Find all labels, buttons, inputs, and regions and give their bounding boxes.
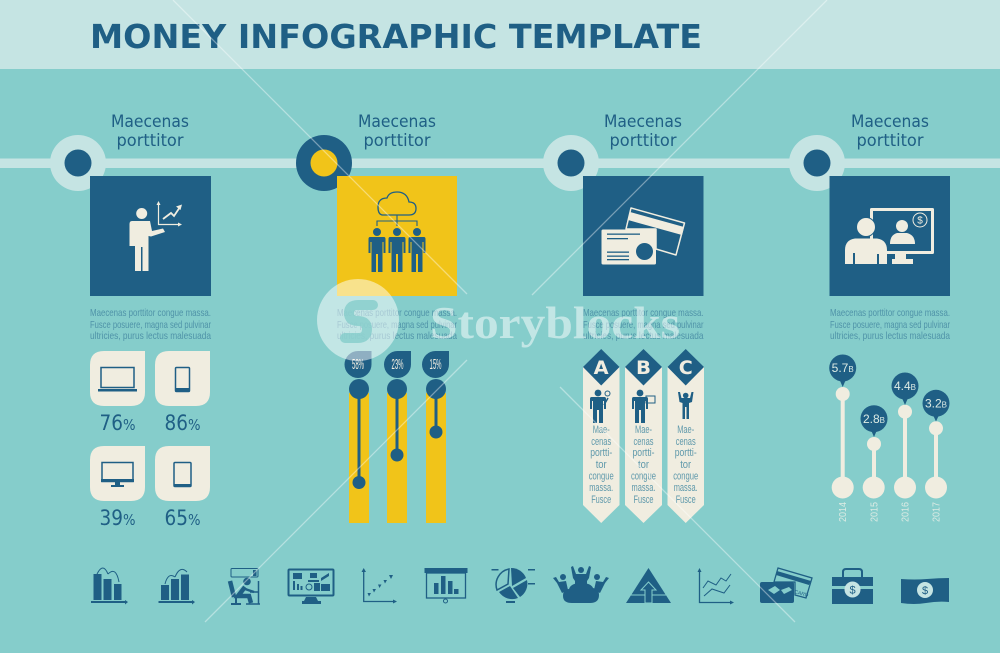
heading 2: Maecenas (358, 112, 436, 132)
icon: briefcase (832, 569, 873, 604)
paragraph 4: ultricies, purus lectus malesuada (830, 330, 950, 342)
tag B: cenas (634, 436, 654, 448)
heading 1 (111, 112, 189, 151)
tag C: congue (673, 470, 698, 482)
tag B: Mae- (635, 424, 652, 436)
icon: cloud team (337, 176, 457, 296)
icon: banknote (901, 578, 949, 604)
tag A: massa. (589, 482, 613, 494)
heading 3: porttitor (610, 131, 677, 151)
panel: column 4 (789, 112, 950, 522)
paragraph 2 (337, 307, 457, 342)
paragraph 1: Fusce posuere, magna sed pulvinar (90, 319, 211, 331)
icon: tired worker (230, 568, 260, 604)
lollipop 2016 (892, 372, 918, 522)
paragraph 2: Maecenas porttitor congue massa. (337, 307, 457, 319)
icon: banknote: $ (922, 585, 928, 597)
lollipop 2014: 5.7B (832, 361, 854, 375)
timeline node 1 (50, 135, 106, 191)
tag A (583, 349, 620, 523)
tag A: portti- (590, 447, 612, 459)
watermark (173, 0, 827, 622)
tile: phone 86% (155, 351, 210, 435)
tag B (625, 349, 662, 523)
panel: column 2 (296, 112, 457, 523)
icon row (91, 566, 949, 604)
lollipop 2015: 2015 (870, 502, 880, 522)
tile: laptop 76% (90, 351, 145, 435)
tag C (668, 349, 704, 523)
tile: monitor 39%: 39% (100, 506, 136, 530)
icon: presenter with chart (90, 176, 211, 296)
timeline bar (0, 158, 1000, 168)
icon: rising bars (158, 569, 195, 604)
icon: line chart (698, 568, 734, 604)
heading 3: Maecenas (604, 112, 682, 132)
lollipop 2017: 2017 (932, 502, 942, 522)
tag C: Mae- (677, 424, 694, 436)
heading 3 (604, 112, 682, 151)
timeline node 3 (543, 135, 599, 191)
tag B: massa. (632, 482, 656, 494)
lollipop 2015 (860, 405, 888, 522)
lollipop 2016: 2016 (900, 502, 912, 522)
lollipop 2016: 4.4B (894, 379, 916, 393)
slider bar 23%: 23% (392, 357, 403, 373)
paragraph 3: Fusce posuere, magna sed pulvinar (583, 319, 704, 331)
paragraph 3 (583, 307, 704, 342)
icon: dashboard monitor (288, 570, 334, 604)
paragraph 1 (90, 307, 211, 342)
paragraph 4: Fusce posuere, magna sed pulvinar (830, 319, 950, 331)
lollipop 2015: 2.8B (863, 412, 885, 426)
tag B: Fusce (634, 494, 654, 506)
tile: monitor 39% (90, 446, 145, 530)
tile: phone 86%: 86% (164, 411, 200, 435)
timeline node 4 (789, 135, 845, 191)
slider bar 15%: 15% (430, 357, 441, 373)
paragraph 3: Maecenas porttitor congue massa. (583, 307, 704, 319)
tag C: tor (680, 459, 691, 471)
tag A: A (594, 357, 609, 379)
tag A: tor (596, 459, 607, 471)
heading 4 (851, 112, 929, 151)
heading 2 (358, 112, 436, 151)
icon: scatter chart (362, 568, 397, 604)
paragraph 1: Maecenas porttitor congue massa. (90, 307, 211, 319)
panel: column 1 (50, 112, 211, 530)
icon: projector screen (424, 568, 468, 603)
lollipop 2014 (829, 354, 856, 522)
paragraph 4: Maecenas porttitor congue massa. (830, 307, 950, 319)
tag B: portti- (632, 447, 655, 459)
icon: video call (830, 176, 950, 296)
icon: credit cards (583, 176, 704, 296)
heading 4: Maecenas (851, 112, 929, 132)
icon: pie bulb (492, 568, 535, 603)
icon: world card: CARD (794, 589, 809, 599)
header band (0, 0, 1000, 69)
icon: video call: $ (917, 216, 923, 226)
watermark: Storyblocks (430, 297, 680, 348)
tile: tablet 65% (155, 446, 210, 530)
paragraph 2: ultricies, purus lectus malesuada (337, 330, 457, 342)
icon: briefcase: $ (849, 584, 856, 596)
heading 1: Maecenas (111, 112, 189, 132)
slider bar 23% (384, 351, 411, 523)
heading 2: porttitor (364, 131, 431, 151)
icon: world card (760, 568, 812, 603)
tag A: congue (589, 470, 614, 482)
slider bar 58%: 58% (352, 357, 364, 373)
heading 4: porttitor (856, 131, 924, 151)
paragraph 3: ultricies, purus lectus malesuada (583, 330, 704, 342)
timeline node 2 (296, 135, 352, 191)
tag B: congue (631, 470, 656, 482)
panel: column 3 (543, 112, 704, 523)
tile: tablet 65%: 65% (164, 506, 200, 530)
tag A: Mae- (593, 424, 610, 436)
paragraph 4 (830, 307, 950, 342)
tag A: cenas (591, 436, 612, 448)
lollipop 2017 (922, 390, 950, 522)
icon: people on cloud (553, 566, 609, 603)
title: MONEY INFOGRAPHIC TEMPLATE (90, 17, 702, 56)
slider bar 15% (422, 351, 449, 523)
icon: falling bars (91, 568, 128, 604)
tag C: massa. (674, 482, 698, 494)
tile: laptop 76%: 76% (100, 411, 136, 435)
heading 1: porttitor (116, 131, 184, 151)
lollipop 2017: 3.2B (925, 396, 947, 410)
slider bar 58% (344, 351, 372, 523)
tag C: cenas (676, 436, 696, 448)
tag C: C (679, 357, 693, 379)
tag C: portti- (675, 447, 697, 459)
tag B: tor (638, 459, 649, 471)
paragraph 2: Fusce posuere, magna sed pulvinar (337, 319, 457, 331)
tag B: B (636, 357, 651, 379)
tag C: Fusce (676, 494, 696, 506)
icon: pyramid arrow (626, 568, 671, 603)
tag A: Fusce (591, 494, 611, 506)
paragraph 1: ultricies, purus lectus malesuada (90, 330, 211, 342)
lollipop 2014: 2014 (838, 502, 849, 522)
